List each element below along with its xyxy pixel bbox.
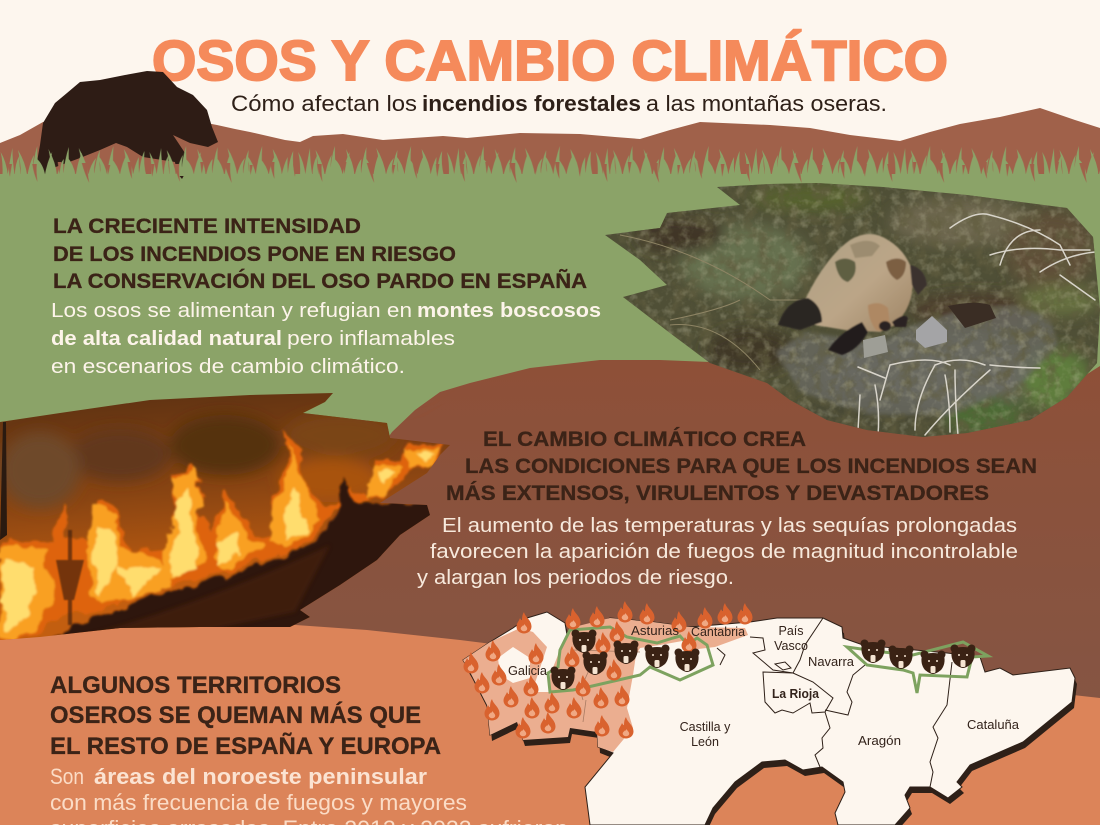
text block: section 1: de alta calidad natural [51, 327, 282, 350]
text block: section 1: Los osos se alimentan y refugian en [51, 299, 412, 322]
bear icons [550, 630, 976, 690]
region borders [717, 618, 952, 787]
subtitle [231, 91, 887, 116]
rocks [916, 316, 947, 348]
text block: section 2 [417, 514, 1018, 589]
fire icons [464, 601, 752, 738]
text block: section 2: favorecen la aparición de fuegos de magnitud incontrolable [430, 540, 1018, 563]
heading: section 2: LAS CONDICIONES PARA QUE LOS INCENDIOS SEAN [465, 454, 1037, 478]
text block: section 1 [51, 299, 601, 378]
heading: section 3: EL RESTO DE ESPAÑA Y EUROPA [50, 732, 441, 760]
foliage texture [600, 180, 1100, 440]
panel: brown background [0, 360, 1100, 705]
map land [463, 612, 1075, 825]
map labels: Cantabria [691, 625, 745, 639]
subtitle: incendios forestales [422, 91, 641, 116]
trees [0, 422, 7, 540]
map labels: Vasco [774, 639, 808, 653]
bear silhouette [35, 71, 218, 179]
subtitle: Cómo afectan los [231, 91, 417, 116]
text block: section 2: y alargan los periodos de riesgo. [417, 566, 734, 589]
photo: forest fire [0, 390, 460, 650]
map labels: León [691, 735, 719, 749]
map labels: Cataluña [967, 718, 1019, 732]
flames [0, 430, 440, 640]
heading: section 3: OSEROS SE QUEMAN MÁS QUE [50, 701, 421, 729]
text block: section 1: pero inflamables [287, 327, 455, 350]
map shadow [465, 618, 1077, 825]
panel: orange background [0, 623, 1100, 825]
title: OSOS Y CAMBIO CLIMÁTICO [152, 29, 948, 93]
grass [0, 146, 1100, 184]
heading: section 2: EL CAMBIO CLIMÁTICO CREA [483, 426, 806, 451]
heading: section 3: ALGUNOS TERRITORIOS [50, 672, 341, 699]
panel: green background [0, 174, 1100, 476]
text block: section 3: Son [50, 764, 84, 789]
burnt ground [52, 476, 430, 636]
brush marks on brown edge [410, 390, 455, 420]
branches [858, 214, 1095, 435]
heading: section 1: LA CRECIENTE INTENSIDAD [53, 214, 361, 238]
map labels: Galicia [508, 664, 547, 678]
map labels: Navarra [808, 655, 854, 669]
text block: section 1: en escenarios de cambio climático. [51, 355, 405, 378]
burned territories [463, 618, 748, 752]
photo: bear in forest [600, 180, 1100, 440]
map labels: Castilla y [680, 720, 731, 734]
text block: section 3: áreas del noroeste peninsular [94, 764, 427, 789]
text block: section 1: montes boscosos [417, 299, 601, 322]
map labels: País [778, 624, 804, 638]
map of northern Spain [463, 601, 1077, 825]
mountains [0, 108, 1100, 180]
text block: section 2: El aumento de las temperaturas y las sequías prolongadas [442, 514, 1017, 537]
map labels: Asturias [631, 624, 679, 638]
heading: section 2: MÁS EXTENSOS, VIRULENTOS Y DEVASTADORES [446, 480, 989, 505]
text block: section 3 [50, 764, 568, 825]
heading: section 3 [50, 672, 441, 760]
bear range outlines [548, 627, 988, 693]
heading: section 1: LA CONSERVACIÓN DEL OSO PARDO EN ESPAÑA [53, 268, 587, 293]
bear in photo [778, 234, 927, 355]
text block: section 3: con más frecuencia de fuegos y mayores [50, 790, 467, 815]
heading: section 1 [53, 214, 587, 293]
map labels: La Rioja [772, 687, 820, 701]
rock mound [775, 305, 1058, 415]
map labels [508, 624, 1019, 749]
subtitle: a las montañas oseras. [646, 91, 887, 116]
heading: section 2 [446, 426, 1037, 505]
heading: section 1: DE LOS INCENDIOS PONE EN RIESGO [53, 242, 456, 266]
map labels: Aragón [858, 734, 901, 748]
